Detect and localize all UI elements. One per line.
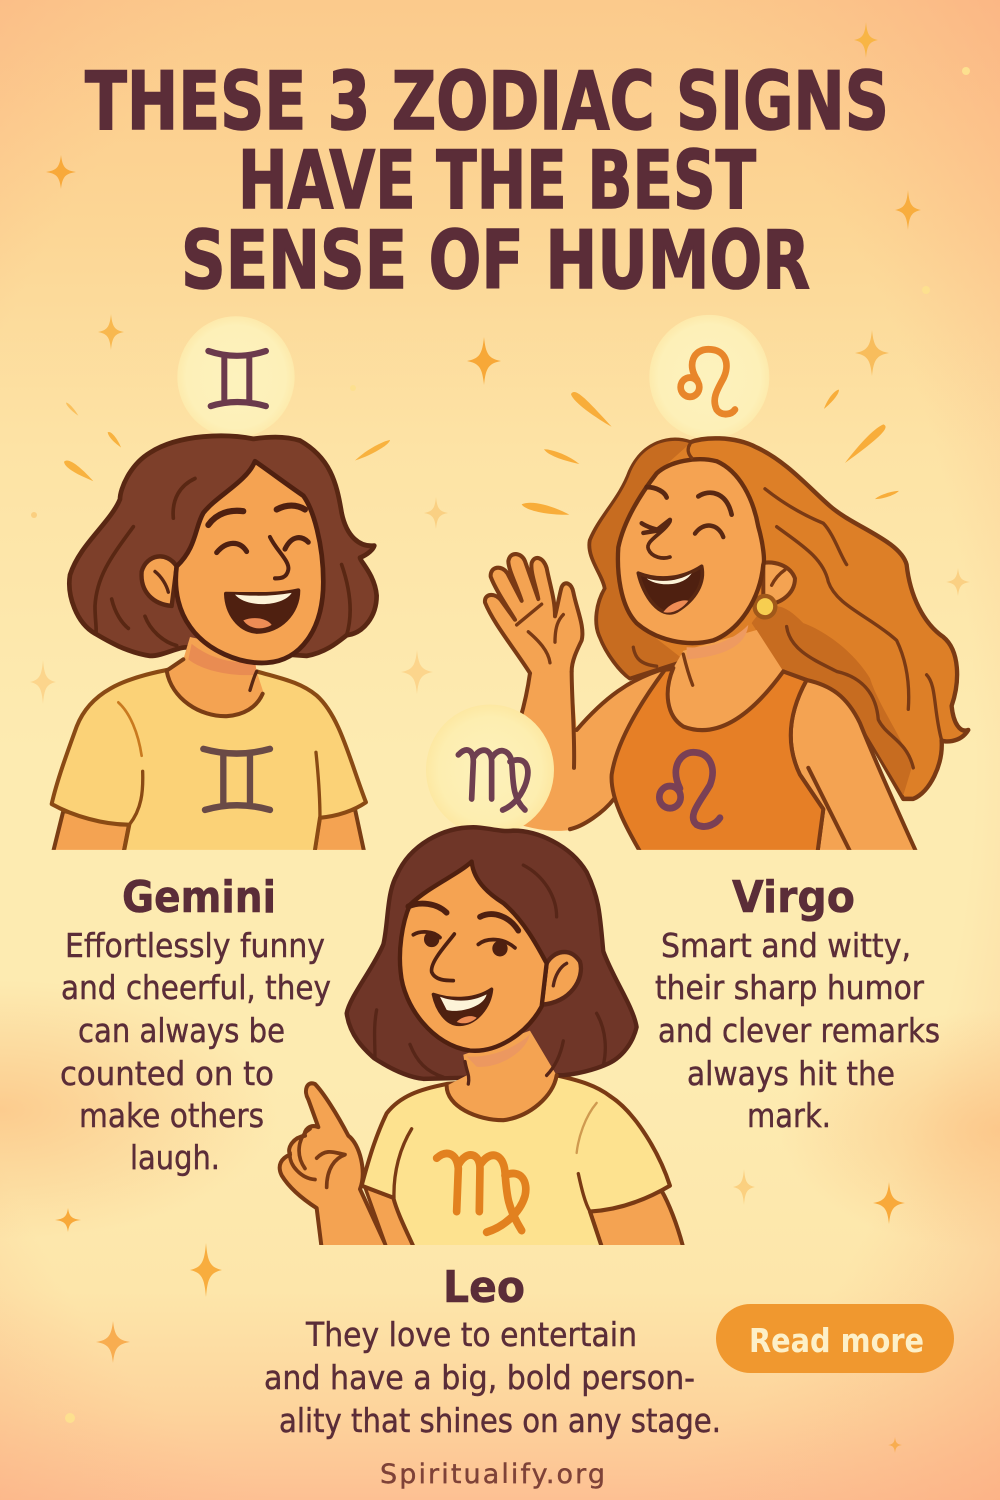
Virgo description bbox=[655, 926, 940, 1135]
ear bbox=[542, 952, 581, 1005]
icon: Gemini symbol halo bbox=[177, 316, 295, 437]
Virgo description: mark. bbox=[747, 1096, 831, 1135]
heading: Gemini: Gemini bbox=[122, 872, 276, 923]
shirt emblem: Gemini bbox=[203, 749, 270, 810]
Virgo description: always hit the bbox=[687, 1054, 895, 1093]
Virgo description: their sharp humor bbox=[655, 968, 924, 1007]
Gemini description: and cheerful, they bbox=[61, 968, 331, 1007]
ear bbox=[142, 556, 177, 606]
character: Virgo bbox=[485, 315, 968, 871]
tank top bbox=[612, 668, 823, 871]
right arm bbox=[592, 1191, 685, 1245]
title bbox=[85, 55, 889, 307]
Gemini description: make others bbox=[79, 1096, 264, 1135]
panel: Leo text bbox=[264, 1262, 721, 1440]
Gemini description: Effortlessly funny bbox=[65, 926, 325, 965]
energy rays bbox=[522, 390, 899, 515]
shirt emblem: Leo bbox=[659, 752, 720, 827]
raised hand bbox=[278, 1081, 384, 1245]
hair bbox=[69, 436, 377, 656]
Leo description: and have a big, bold person- bbox=[264, 1358, 695, 1397]
shirt emblem: Virgo bbox=[437, 1153, 526, 1232]
heading: Virgo: Virgo bbox=[732, 872, 855, 923]
Gemini description bbox=[60, 926, 331, 1177]
left upper arm bbox=[364, 1188, 410, 1245]
Virgo description: and clever remarks bbox=[658, 1011, 940, 1050]
Leo description: ality that shines on any stage. bbox=[279, 1401, 721, 1440]
hair strands bbox=[95, 478, 350, 646]
shirt details bbox=[118, 702, 320, 825]
panel: Virgo text bbox=[655, 872, 940, 1135]
Gemini description: counted on to bbox=[60, 1054, 274, 1093]
shirt bbox=[362, 1075, 670, 1262]
facial features bbox=[208, 506, 308, 632]
panel: Gemini text bbox=[60, 872, 331, 1177]
button: Read more: Read more bbox=[749, 1321, 924, 1360]
icon: Virgo symbol halo bbox=[426, 704, 554, 835]
energy rays bbox=[64, 403, 390, 481]
facial features bbox=[408, 904, 518, 1024]
Leo description bbox=[264, 1315, 721, 1440]
footer: website: Spiritualify.org bbox=[380, 1459, 605, 1490]
character: Leo bbox=[280, 704, 687, 1262]
face bbox=[618, 459, 764, 643]
Leo description: They love to entertain bbox=[305, 1315, 637, 1354]
neck bbox=[167, 637, 263, 716]
shirt bbox=[52, 670, 366, 871]
face bbox=[176, 461, 323, 663]
right shoulder bbox=[792, 678, 918, 850]
icon: Leo symbol halo bbox=[649, 315, 769, 439]
shirt details bbox=[394, 1103, 597, 1212]
hair strands bbox=[375, 865, 605, 1077]
title: HAVE THE BEST bbox=[238, 134, 756, 227]
neck bbox=[668, 630, 783, 730]
darker hair shading bbox=[591, 441, 912, 795]
face bbox=[400, 862, 547, 1051]
arms bbox=[52, 810, 366, 850]
facial features bbox=[638, 487, 732, 613]
hair bbox=[590, 438, 968, 799]
character: Gemini bbox=[48, 316, 390, 871]
Gemini description: laugh. bbox=[130, 1138, 220, 1177]
Gemini description: can always be bbox=[78, 1011, 285, 1050]
hair strands bbox=[633, 444, 942, 768]
button: Read more bbox=[716, 1304, 954, 1373]
waving arm and hand bbox=[485, 554, 667, 831]
ear and earring bbox=[755, 562, 795, 617]
title: SENSE OF HUMOR bbox=[181, 214, 810, 307]
neck bbox=[447, 1031, 557, 1120]
hair bbox=[347, 827, 637, 1079]
heading: Leo: Leo bbox=[443, 1262, 525, 1313]
Virgo description: Smart and witty, bbox=[661, 926, 911, 965]
